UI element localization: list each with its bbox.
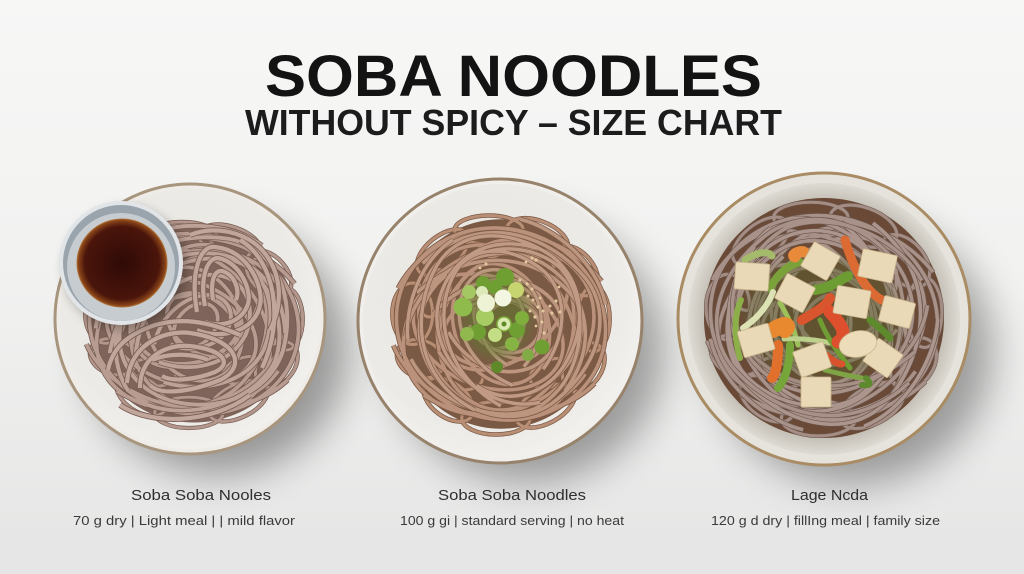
caption 2 details: 100 g gi | standard serving | no heat <box>400 514 625 528</box>
plate 2 scallion garnish <box>454 268 550 373</box>
plate 2 dish <box>358 179 642 463</box>
plate 1: small soba with dipping sauce <box>55 184 348 474</box>
plate 3: large soba with tofu and vegetables <box>675 173 992 484</box>
plate 2 sesame seeds <box>479 256 562 335</box>
caption 3 details: 120 g d dry | fillIng meal | family size <box>711 514 940 528</box>
plate 3 bowl <box>678 173 970 465</box>
plate 3 carrot strips <box>772 240 884 378</box>
plate 3 green vegetables <box>736 253 890 388</box>
plate 3 tofu cubes <box>734 242 916 407</box>
caption 3 name: Lage Ncda <box>791 487 869 504</box>
soy dipping sauce <box>76 218 168 308</box>
plate 2 shadow <box>392 218 664 482</box>
plate 1 noodles <box>68 211 320 443</box>
plate 1 dish <box>55 184 325 454</box>
caption column 3 <box>711 487 940 528</box>
subheading: without spicy size chart: WITHOUT SPICY – SIZE CHART <box>245 102 782 143</box>
plate 1 dipping bowl <box>59 201 187 330</box>
plate 2 noodles <box>368 180 638 455</box>
caption 1 details: 70 g dry | Light meal | | mild flavor <box>73 514 295 528</box>
plate 2: standard soba with scallions <box>358 179 664 482</box>
title <box>245 44 782 143</box>
plate 3 noodles <box>675 176 974 472</box>
plate 3 tofu dumpling <box>837 327 879 361</box>
caption column 1 <box>73 487 295 528</box>
caption column 2 <box>400 487 625 528</box>
heading: soba noodles: SOBA NOODLES <box>265 44 762 109</box>
plate 1 shadow <box>88 222 348 474</box>
caption 1 name: Soba Soba Nooles <box>131 487 271 504</box>
plate 3 shadow <box>712 216 992 484</box>
plate 3 vegetable bed <box>744 256 900 380</box>
caption 2 name: Soba Soba Noodles <box>438 487 586 504</box>
